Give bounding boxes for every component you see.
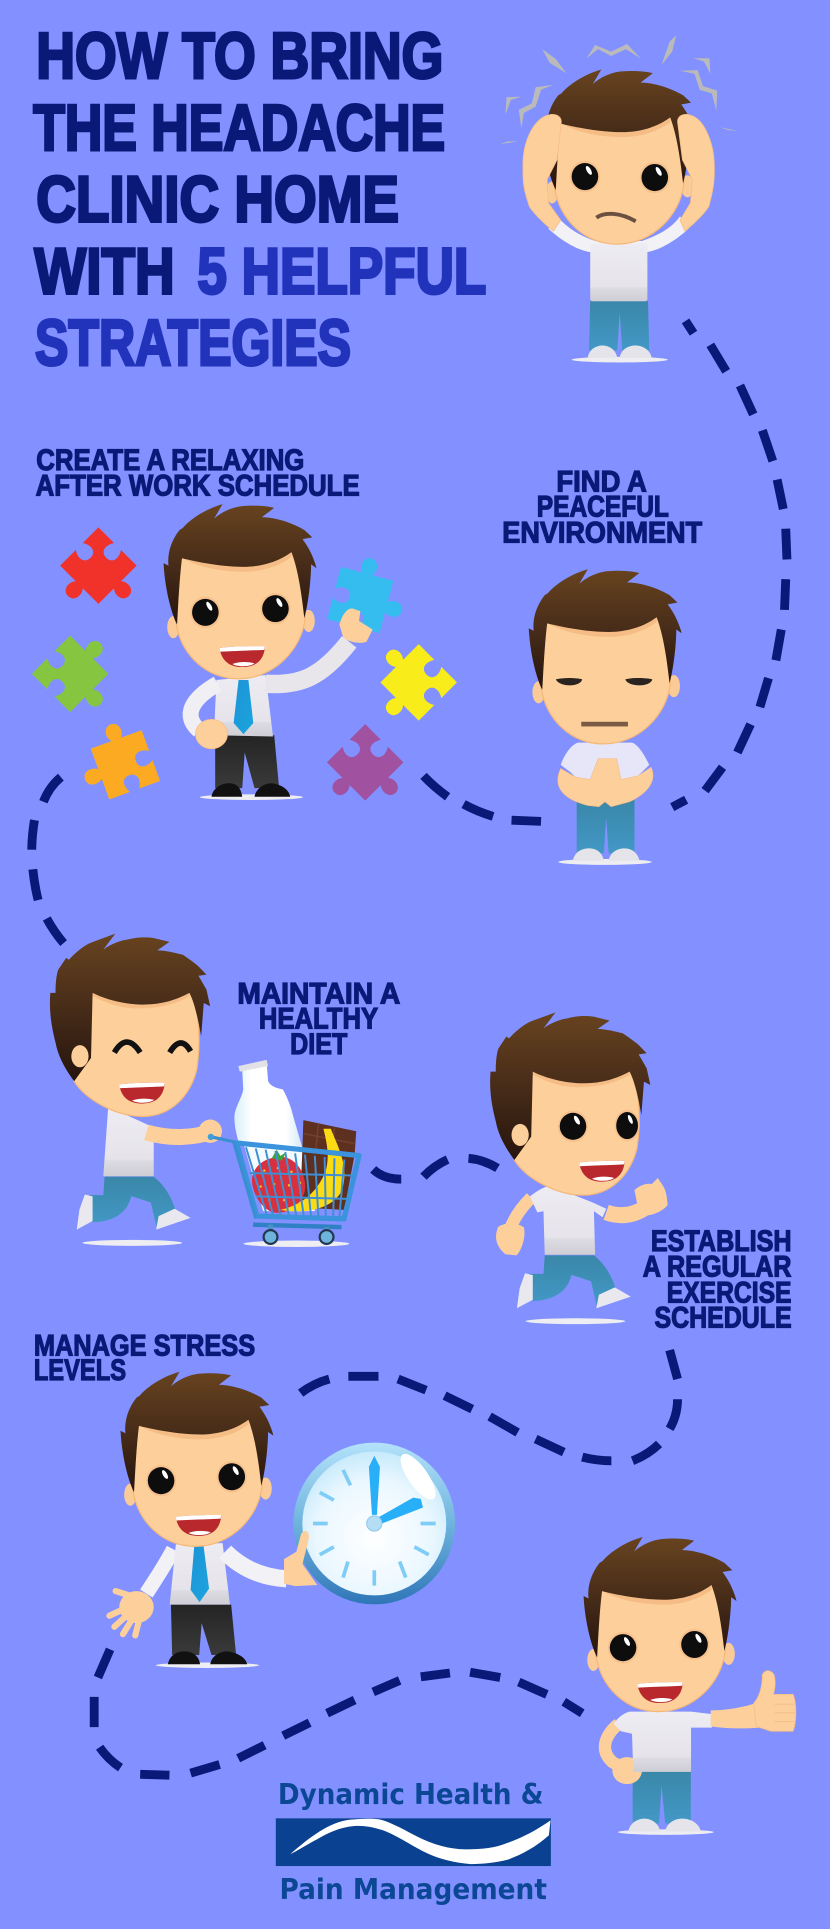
bottle cap (238, 1060, 268, 1072)
shoes (588, 346, 652, 358)
hand (199, 1120, 222, 1143)
front arm (606, 1207, 646, 1215)
straight mouth (581, 722, 628, 726)
hand on clock (284, 1531, 317, 1586)
arms raised (523, 114, 714, 231)
smiling closed eyes (114, 1042, 191, 1053)
chocolate bar (300, 1120, 356, 1210)
left hand (612, 1757, 642, 1784)
heading: find a peaceful environment: FIND A (556, 465, 647, 498)
title: THE HEADACHE (33, 92, 445, 164)
banana (280, 1129, 344, 1211)
eyes (570, 161, 670, 193)
trousers (171, 1605, 236, 1655)
raised arm (266, 642, 349, 684)
title: 5 HELPFUL (197, 235, 486, 307)
logo text bottom: Pain Management (279, 1872, 547, 1906)
puzzle pieces (32, 527, 457, 823)
shoes (168, 1651, 247, 1664)
clock face (302, 1452, 446, 1595)
strawberry leaf (272, 1150, 287, 1161)
folded hand (196, 719, 227, 749)
heading: maintain a healthy diet: DIET (290, 1028, 347, 1061)
head (50, 934, 210, 1116)
tie (234, 680, 253, 734)
back arm (509, 1198, 531, 1232)
heading: maintain a healthy diet: HEALTHY (259, 1002, 378, 1035)
shopping cart with food (208, 1060, 359, 1247)
heading: establish a regular exercise schedule: EXERCISE (667, 1276, 792, 1309)
jeans (89, 1177, 176, 1226)
heading: find a peaceful environment: PEACEFUL (537, 491, 669, 524)
tie (191, 1546, 209, 1602)
head (584, 1537, 737, 1712)
milk bottle (234, 1065, 303, 1151)
white contents behind the wires (243, 1144, 315, 1211)
logo text top: Dynamic Health & (278, 1777, 543, 1811)
pain sparks (500, 35, 738, 144)
logo (276, 1777, 551, 1906)
strawberry (252, 1157, 305, 1213)
heading: manage stress levels (34, 1330, 255, 1387)
shoes (628, 1819, 701, 1831)
trousers (215, 735, 279, 788)
mouth (219, 646, 265, 667)
heading: establish a regular exercise schedule: ESTABLISH (651, 1225, 792, 1258)
shirt (530, 1185, 606, 1255)
shadow (572, 357, 668, 362)
sad mouth (596, 214, 636, 221)
basket frame (237, 1143, 359, 1219)
title (33, 20, 486, 379)
red piece (49, 527, 148, 626)
jeans (577, 799, 634, 853)
hub (367, 1516, 382, 1531)
heading: create a relaxing after work schedule: CREATE A RELAXING (36, 444, 304, 477)
character: man with shopping cart (50, 934, 222, 1246)
heading: maintain a healthy diet (237, 977, 400, 1061)
logo banner (276, 1818, 551, 1866)
character: thumbs up man (584, 1537, 796, 1835)
heading: create a relaxing after work schedule: AFTER WORK SCHEDULE (36, 469, 360, 502)
shadow (618, 1829, 714, 1835)
eyes (146, 1461, 247, 1496)
title: WITH (34, 235, 175, 307)
yellow piece (358, 633, 457, 732)
shadow (526, 1318, 625, 1324)
jeans (633, 1771, 691, 1824)
left arm (146, 1549, 173, 1594)
shadow (156, 1663, 259, 1668)
back hand (496, 1223, 524, 1255)
outer ring (293, 1443, 455, 1604)
shoes (517, 1273, 631, 1308)
jeans (529, 1255, 616, 1305)
character: meditating man (529, 569, 682, 865)
raised hand (339, 609, 373, 643)
head (164, 504, 317, 679)
shirt (170, 1543, 230, 1605)
character: puzzle man (164, 504, 373, 800)
heading: find a peaceful environment (502, 465, 702, 550)
lower rail (253, 1225, 341, 1227)
heading: establish a regular exercise schedule: A REGULAR (643, 1251, 792, 1284)
heading: find a peaceful environment: ENVIRONMENT (502, 517, 702, 550)
open hand (109, 1591, 154, 1635)
jeans (589, 301, 649, 350)
orange piece (70, 715, 160, 805)
clock (293, 1443, 455, 1604)
character: headache (500, 35, 738, 362)
closed eyes (556, 678, 652, 685)
shadow (200, 794, 303, 800)
hour ticks (313, 1470, 436, 1586)
glass highlight (395, 1449, 442, 1505)
heading: manage stress levels: LEVELS (34, 1354, 126, 1387)
sleeves (548, 216, 689, 252)
eyes (190, 593, 291, 628)
shirt (561, 743, 649, 780)
left arm (605, 1724, 627, 1771)
shirt (614, 1712, 712, 1772)
shoes (212, 783, 290, 797)
logo wave (290, 1819, 551, 1864)
mouth (637, 1682, 683, 1703)
arm (146, 1131, 212, 1137)
heading: create a relaxing after work schedule (36, 444, 360, 502)
shadow (558, 859, 652, 865)
shadow (83, 1240, 182, 1246)
shirt (103, 1107, 154, 1176)
head (121, 1372, 273, 1546)
thumbs up hand (754, 1671, 796, 1731)
character: running man (490, 1012, 668, 1324)
eyes (558, 1110, 640, 1142)
title: HOW TO BRING (36, 20, 443, 92)
shadow (243, 1241, 349, 1247)
finger creases (775, 1704, 796, 1721)
head (542, 69, 695, 244)
arms and praying hands (558, 759, 653, 807)
handle (212, 1137, 256, 1219)
head (490, 1012, 650, 1195)
shirt (590, 243, 647, 301)
title: CLINIC HOME (36, 163, 399, 235)
shoes (573, 848, 639, 861)
wheels (264, 1230, 333, 1244)
chocolate grooves (304, 1124, 354, 1151)
right arm (711, 1702, 760, 1728)
front fist (634, 1178, 668, 1215)
character: man with clock (109, 1372, 317, 1668)
shirt (214, 675, 273, 737)
folded arm (191, 684, 218, 730)
strawberry seeds (259, 1167, 301, 1201)
mouth (579, 1161, 625, 1182)
title: STRATEGIES (35, 307, 351, 379)
head (529, 569, 682, 744)
heading: manage stress levels: MANAGE STRESS (34, 1330, 255, 1363)
basket wires (246, 1147, 353, 1217)
heading: establish a regular exercise schedule (643, 1225, 792, 1334)
mouth (176, 1515, 221, 1536)
wheel stems (271, 1225, 327, 1233)
minute hand (369, 1456, 380, 1515)
green piece (32, 624, 131, 723)
purple piece (316, 724, 415, 823)
right arm (225, 1552, 287, 1579)
heading: maintain a healthy diet: MAINTAIN A (237, 977, 400, 1010)
heading: establish a regular exercise schedule: SCHEDULE (655, 1301, 792, 1334)
hour hand (376, 1498, 423, 1525)
dashed path connecting the characters (32, 321, 787, 1775)
eyes (608, 1629, 710, 1663)
blue piece (327, 551, 413, 637)
shoes (77, 1195, 191, 1230)
mouth (119, 1083, 165, 1104)
